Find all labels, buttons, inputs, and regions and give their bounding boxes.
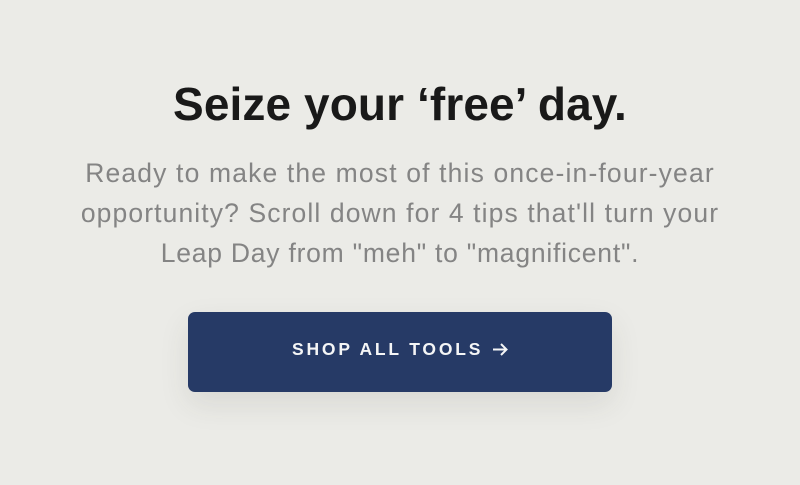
- icon: arrow: [493, 343, 508, 356]
- button: shop all tools: SHOP ALL TOOLS: [292, 339, 483, 359]
- button: shop all tools: [188, 312, 612, 392]
- body text: Ready to make the most of this once-in-four-year: [85, 158, 715, 188]
- body text: [81, 158, 719, 268]
- title: Seize your ‘free’ day.: [173, 78, 627, 130]
- body text: Leap Day from "meh" to "magnificent".: [161, 238, 639, 268]
- body text: opportunity? Scroll down for 4 tips that'll turn your: [81, 198, 719, 228]
